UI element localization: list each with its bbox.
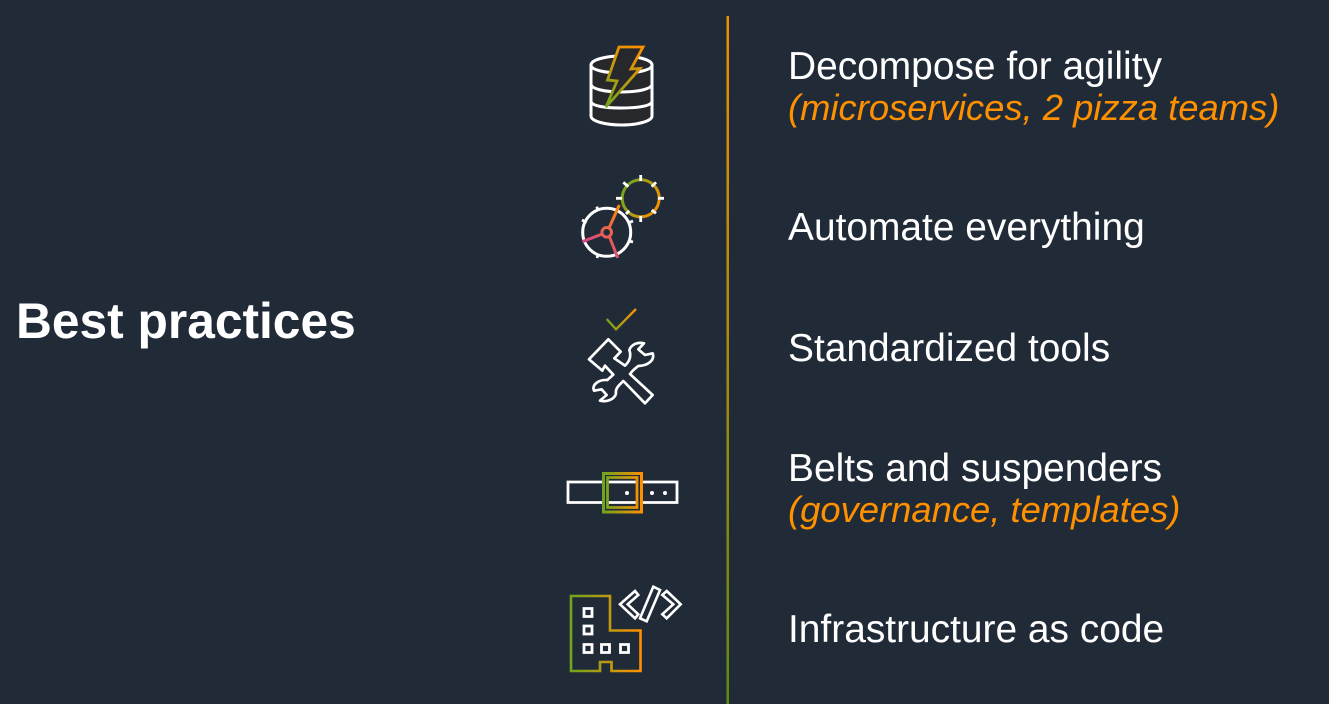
title: Best practices [16,293,356,349]
text: belts and suspenders: (governance, templates) [788,489,1180,530]
icon: check mark [607,309,636,329]
text: belts and suspenders [788,447,1180,530]
icon: gears [582,175,664,258]
text: belts and suspenders: Belts and suspenders [788,447,1162,490]
text: infrastructure as code: Infrastructure as code [788,608,1164,651]
text: decompose for agility: (microservices, 2 pizza teams) [788,87,1279,128]
vertical divider [726,16,729,704]
text: automate everything: Automate everything [788,206,1145,249]
text: standardized tools: Standardized tools [788,327,1110,370]
text: decompose for agility [788,45,1279,128]
icon: belt and buckle [568,474,677,512]
icon: database with lightning bolt [591,47,652,125]
text: decompose for agility: Decompose for agility [788,45,1162,88]
icon: hammer and wrench [589,339,653,403]
icon: building with code [571,587,681,671]
